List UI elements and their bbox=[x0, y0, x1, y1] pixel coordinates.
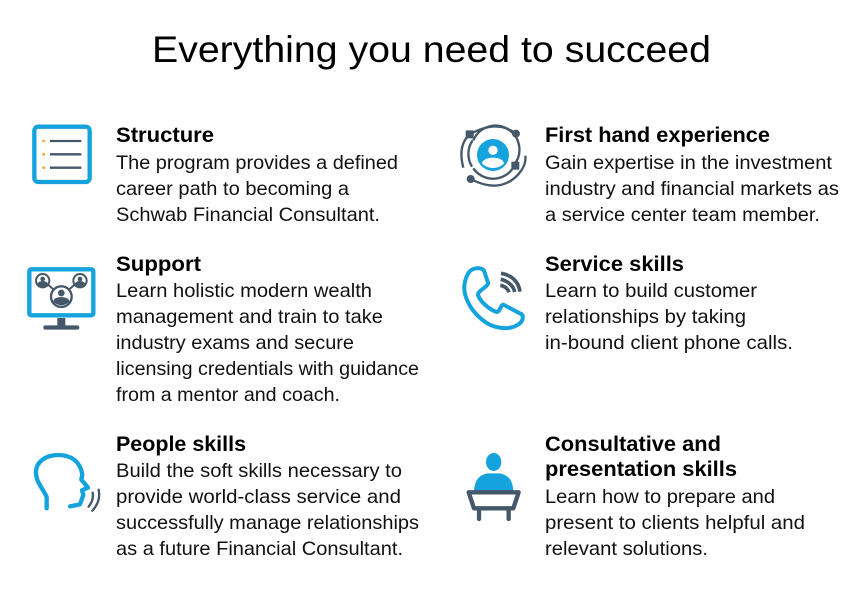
text: people skills: Build the soft skills necessary to bbox=[116, 460, 402, 482]
panel: structure bbox=[34, 124, 398, 226]
heading: consultative and presentation skills: presentation skills bbox=[545, 458, 737, 481]
text: structure bbox=[116, 152, 398, 226]
text: first hand experience: Gain expertise in the investment bbox=[545, 152, 833, 174]
text: people skills: as a future Financial Consultant. bbox=[116, 538, 403, 560]
text: people skills bbox=[116, 460, 419, 560]
icon: monitor with people bbox=[29, 269, 93, 330]
text: support: from a mentor and coach. bbox=[116, 384, 340, 406]
heading: consultative and presentation skills: Consultative and bbox=[545, 433, 721, 456]
heading: support: Support bbox=[116, 253, 201, 276]
text: consultative and presentation skills: Learn how to prepare and bbox=[545, 486, 775, 508]
text: structure: The program provides a defined bbox=[116, 152, 398, 174]
icon: speaking head bbox=[36, 455, 99, 511]
panel: people skills bbox=[36, 433, 419, 560]
panel: consultative and presentation skills bbox=[469, 433, 805, 560]
text: support bbox=[116, 280, 419, 406]
heading: first hand experience: First hand experience bbox=[545, 124, 770, 147]
text: consultative and presentation skills: relevant solutions. bbox=[545, 538, 708, 560]
text: people skills: successfully manage relationships bbox=[116, 512, 419, 534]
text: structure: career path to becoming a bbox=[116, 178, 349, 200]
text: consultative and presentation skills bbox=[545, 486, 805, 560]
text: service skills bbox=[545, 280, 793, 354]
icon: phone with signal bbox=[464, 268, 523, 328]
text: people skills: provide world-class service and bbox=[116, 486, 401, 508]
icon: person in orbit bbox=[461, 126, 526, 186]
text: consultative and presentation skills: present to clients helpful and bbox=[545, 512, 805, 534]
icon: presenter at podium bbox=[469, 453, 519, 519]
heading: consultative and presentation skills bbox=[545, 433, 737, 481]
panel: support bbox=[29, 253, 419, 406]
text: first hand experience: a service center team member. bbox=[545, 204, 820, 226]
heading: service skills: Service skills bbox=[545, 253, 684, 276]
text: structure: Schwab Financial Consultant. bbox=[116, 204, 380, 226]
text: support: industry exams and secure bbox=[116, 332, 354, 354]
text: first hand experience bbox=[545, 152, 839, 226]
icon: checklist bbox=[34, 127, 90, 182]
panel: first hand experience bbox=[461, 124, 839, 226]
heading: people skills: People skills bbox=[116, 433, 246, 456]
text: support: Learn holistic modern wealth bbox=[116, 280, 372, 302]
text: first hand experience: industry and financial markets as bbox=[545, 178, 839, 200]
text: support: licensing credentials with guidance bbox=[116, 358, 419, 380]
text: service skills: Learn to build customer bbox=[545, 280, 758, 302]
text: service skills: in-bound client phone calls. bbox=[545, 332, 793, 354]
title: Everything you need to succeed bbox=[152, 29, 711, 70]
text: service skills: relationships by taking bbox=[545, 306, 746, 328]
text: support: management and train to take bbox=[116, 306, 383, 328]
panel: service skills bbox=[464, 253, 793, 354]
heading: structure: Structure bbox=[116, 124, 214, 147]
